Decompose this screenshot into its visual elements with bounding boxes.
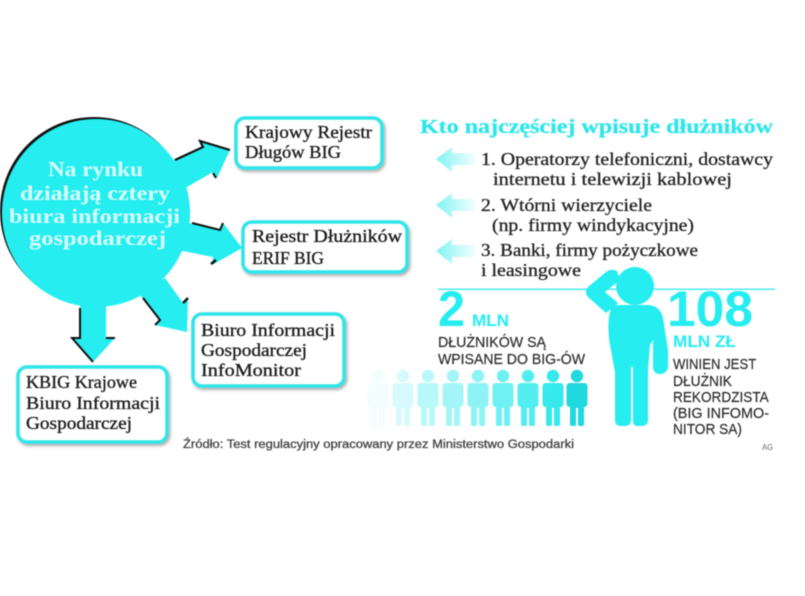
arrow to Biuro Informacji	[140, 278, 188, 332]
icon: arrow 1	[436, 147, 475, 172]
description: NITOR SA)	[673, 421, 742, 438]
box: Krajowy Rejestr Długów BIG: Długów BIG	[245, 142, 341, 162]
left panel: offices diagram	[0, 117, 407, 442]
unit MLN ZŁ: MLN ZŁ	[673, 332, 736, 351]
list item 1: internetu i telewizji kablowej	[493, 169, 732, 189]
box: Krajowy Rejestr Długów BIG: Krajowy Rejestr	[245, 122, 372, 142]
unit MLN: MLN	[472, 311, 509, 330]
box: Biuro Informacji Gospodarczej InfoMonitor: Biuro Informacji	[201, 320, 335, 340]
circle heading: działają cztery	[20, 181, 171, 205]
arrow to KBIG	[72, 300, 115, 362]
icon: arrow 3	[436, 239, 475, 264]
box: KBIG Krajowe Biuro Informacji Gospodarczej: Gospodarczej	[26, 413, 132, 433]
source note: Źródło: Test regulacyjny opracowany przez Ministerstwo Gospodarki	[183, 438, 574, 451]
number 108: 108	[667, 281, 753, 337]
list item 3: i leasingowe	[481, 260, 581, 280]
list item 2: 2. Wtórni wierzyciele	[481, 195, 652, 215]
list item 1: 1. Operatorzy telefoniczni, dostawcy	[481, 149, 773, 169]
icon: arrow 2	[436, 193, 475, 218]
divider line	[438, 288, 775, 290]
big figure scratching head	[586, 267, 668, 426]
author credit: AG	[762, 443, 773, 452]
arrow to Krajowy Rejestr	[165, 140, 230, 187]
box: Rejestr Dłużników ERIF BIG: ERIF BIG	[252, 248, 324, 268]
row of small figures	[368, 370, 588, 426]
stat: 108 mln zł	[667, 281, 773, 438]
box: Biuro Informacji Gospodarczej InfoMonitor: Gospodarczej	[201, 340, 307, 360]
list item 3: 3. Banki, firmy pożyczkowe	[481, 240, 698, 260]
description: DŁUŻNIK	[673, 372, 732, 390]
box: KBIG Krajowe Biuro Informacji Gospodarczej: Biuro Informacji	[26, 393, 160, 413]
circle heading: gospodarczej	[29, 226, 166, 250]
central circle	[0, 117, 190, 307]
circle heading: biura informacji	[9, 204, 180, 228]
box: Biuro Informacji Gospodarczej InfoMonitor: InfoMonitor	[201, 360, 301, 380]
description: (BIG INFOMO-	[673, 405, 769, 422]
box: KBIG Krajowe Biuro Informacji Gospodarczej: KBIG Krajowe	[26, 372, 137, 392]
description: DŁUŻNIKÓW SĄ	[438, 333, 547, 351]
arrow to Rejestr Dłużników	[178, 222, 242, 265]
description: WINIEN JEST	[673, 356, 756, 373]
stat: 2 mln	[438, 281, 586, 368]
description: WPISANE DO BIG-ÓW	[438, 351, 586, 368]
box: Krajowy Rejestr Długów BIG	[236, 118, 382, 168]
ranked list	[436, 147, 778, 280]
circle heading: Na rynku	[48, 157, 143, 181]
box: Biuro Informacji Gospodarczej InfoMonitor	[193, 314, 344, 386]
heading: Kto najczęściej wpisuje dłużników: Kto najczęściej wpisuje dłużników	[420, 116, 774, 138]
box: KBIG Krajowe Biuro Informacji Gospodarczej	[18, 367, 167, 442]
number 2: 2	[438, 281, 465, 337]
description: REKORDZISTA	[673, 389, 769, 406]
box: Rejestr Dłużników ERIF BIG	[243, 222, 407, 272]
box: Rejestr Dłużników ERIF BIG: Rejestr Dłużników	[252, 226, 402, 246]
list item 2: (np. firmy windykacyjne)	[492, 215, 694, 236]
